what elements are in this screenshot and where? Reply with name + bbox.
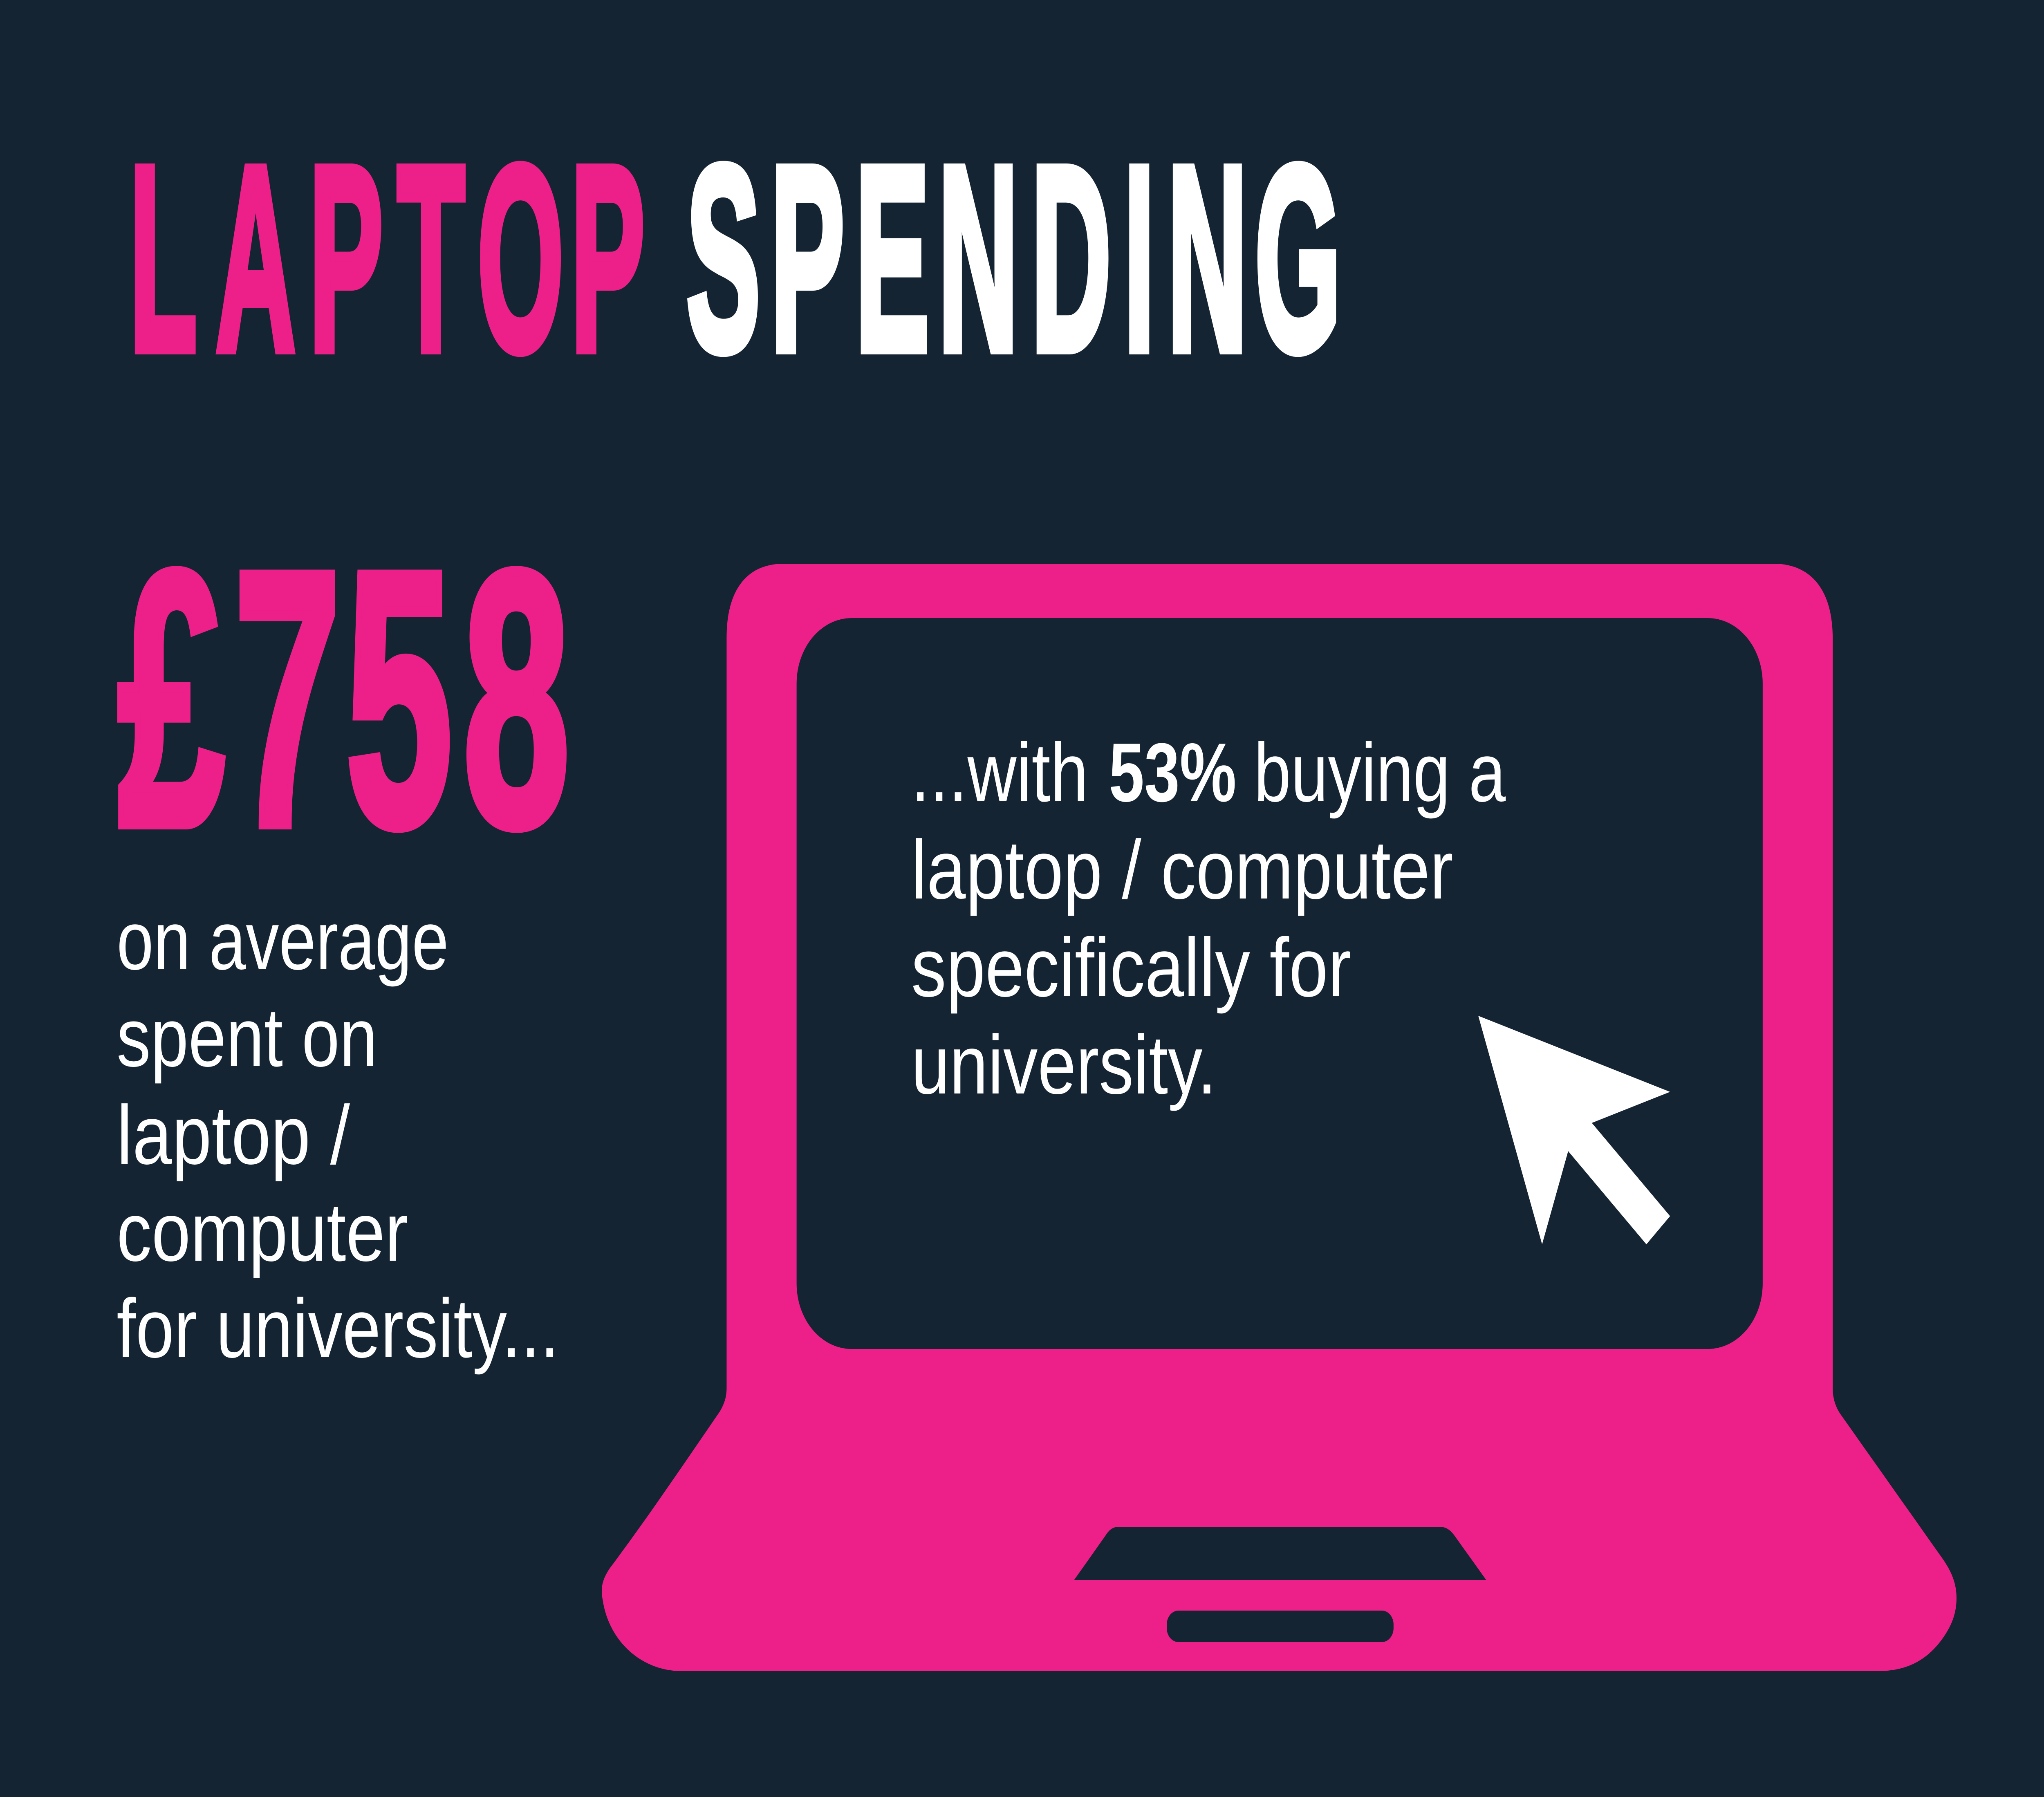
text block: 53% buying a laptop: specifically for [911,921,1351,1014]
big number: average spend: £758 [118,496,570,901]
trackpad button [1167,1611,1394,1642]
text block: 53% buying a laptop: university. [911,1018,1217,1111]
title word: Spending: SPENDING [686,112,1341,406]
text block: 53% buying a laptop: buying a [1254,726,1506,819]
text block: average spend description: spent on [117,991,377,1084]
text block: average spend description [117,894,559,1375]
title word: Laptop: LAPTOP [130,112,645,406]
title: Laptop Spending [130,112,1341,406]
laptop illustration [602,564,1957,1671]
text block: 53% buying a laptop: 53% [1109,726,1237,819]
text block: 53% buying a laptop: ...with [911,726,1088,819]
text block: average spend description: for university... [117,1282,559,1375]
text block: average spend description: computer [117,1185,408,1279]
text block: 53% buying a laptop [911,726,1506,1111]
text block: average spend description: laptop / [117,1089,350,1182]
text block: 53% buying a laptop: laptop / computer [911,823,1453,916]
laptop body [602,564,1957,1671]
text block: average spend description: on average [117,894,449,987]
trackpad [1074,1527,1486,1580]
icon: mouse cursor arrow [1478,1016,1670,1244]
laptop screen [797,618,1763,1349]
